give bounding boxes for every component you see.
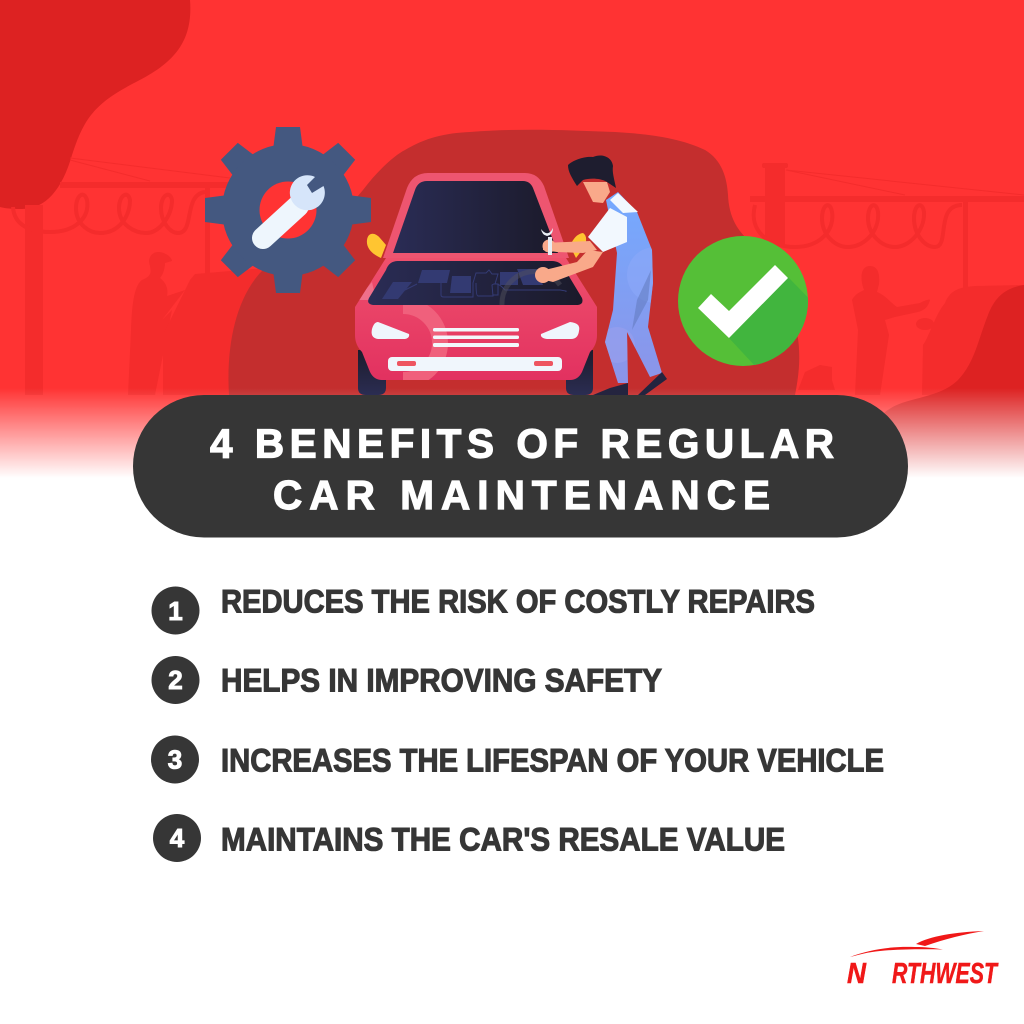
background: top-left dark red blob (0, 0, 190, 209)
shoes (638, 372, 667, 395)
title: 4 BENEFITS OF REGULAR (210, 420, 834, 466)
shirt (610, 193, 638, 213)
windshield (393, 181, 558, 253)
title: CAR MAINTENANCE (273, 472, 770, 518)
benefit 1: REDUCES THE RISK OF COSTLY REPAIRS (221, 583, 815, 619)
face (583, 182, 610, 203)
benefit 4: 4 (170, 823, 185, 853)
headlights (372, 322, 409, 339)
benefit 1: 1 (168, 596, 183, 626)
benefit 4 (153, 814, 785, 862)
benefit 2: HELPS IN IMPROVING SAFETY (221, 662, 662, 698)
benefit 4: MAINTAINS THE CAR'S RESALE VALUE (221, 821, 785, 857)
logo: Northwest: N (847, 958, 867, 990)
overalls (605, 192, 662, 383)
background: central dark red blob (228, 130, 799, 395)
background: left garage silhouette (13, 158, 265, 395)
illustration: red car (355, 173, 597, 395)
benefit 3: INCREASES THE LIFESPAN OF YOUR VEHICLE (221, 742, 884, 778)
logo: Northwest (847, 931, 999, 990)
background: red header (0, 0, 1024, 480)
wheels (358, 350, 386, 395)
background: bottom-right dark red blob (870, 285, 1024, 480)
background: right garage silhouette (750, 163, 1024, 395)
icon: gear with wrench (205, 127, 371, 293)
illustration: mechanic (535, 156, 667, 395)
cabin (383, 173, 569, 258)
benefit 2: 2 (168, 665, 183, 695)
body (355, 258, 597, 380)
title (210, 420, 834, 518)
bumper (388, 357, 562, 371)
title pill (133, 395, 908, 538)
grille (433, 328, 519, 347)
arms (543, 241, 597, 253)
mirrors (367, 234, 386, 258)
icon: green check badge (678, 236, 808, 366)
wrench (548, 237, 552, 255)
benefit 1 (152, 583, 815, 634)
hood opening (368, 261, 582, 305)
engine parts (382, 269, 543, 299)
benefit 2 (152, 656, 662, 704)
benefit 3: 3 (168, 744, 182, 774)
benefit 3 (151, 736, 884, 784)
hair (568, 155, 616, 188)
fade to white (0, 388, 1024, 480)
